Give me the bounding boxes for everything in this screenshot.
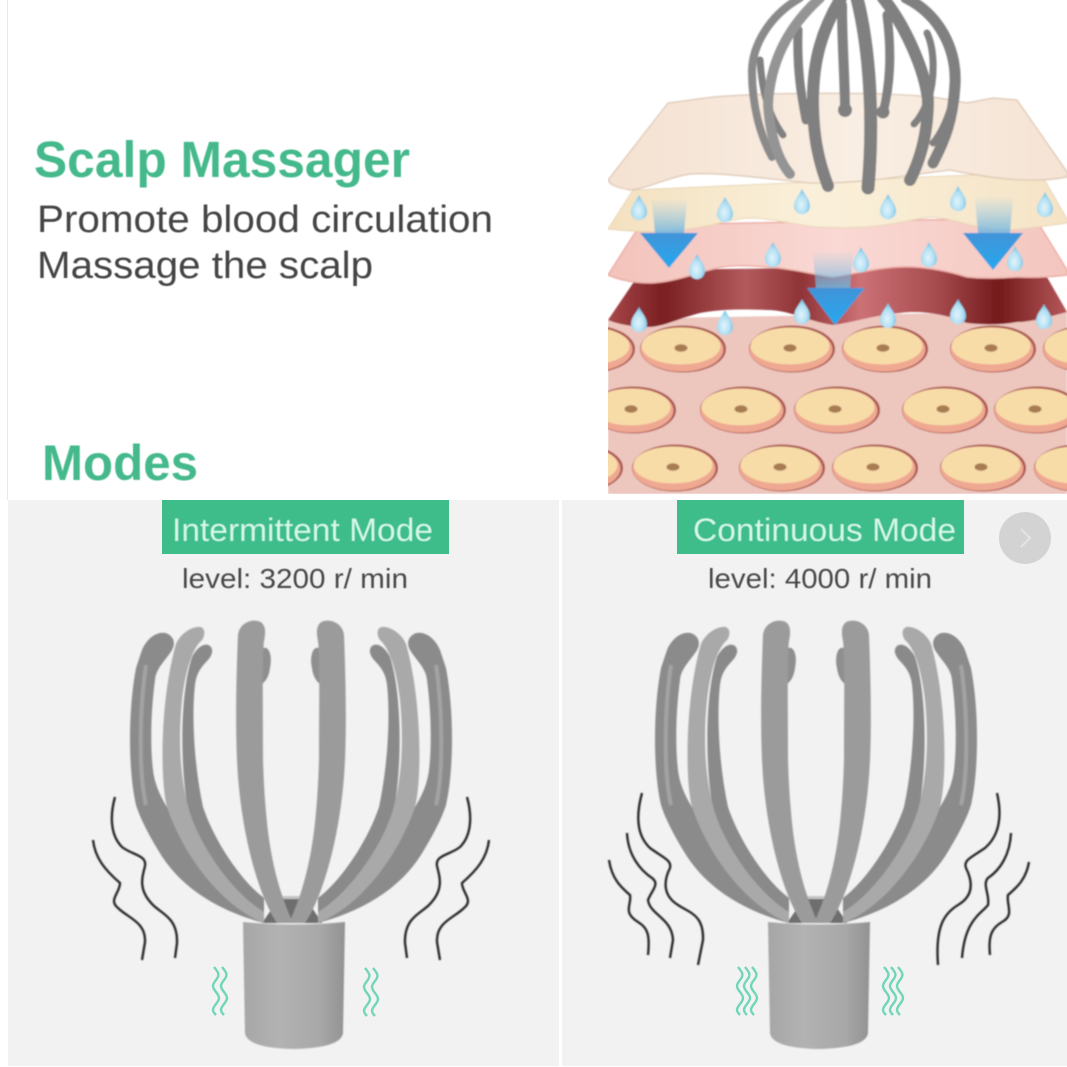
top skin layer bbox=[608, 93, 1067, 190]
vibration lines bbox=[93, 797, 489, 960]
mode label: Intermittent Mode bbox=[172, 512, 433, 548]
heading: Scalp Massager: Scalp Massager bbox=[34, 131, 410, 188]
massager product bbox=[655, 621, 977, 1049]
speed level: level: 3200 r/ min bbox=[182, 563, 408, 594]
mode label: Continuous Mode bbox=[693, 512, 956, 548]
speed level: level: 4000 r/ min bbox=[708, 563, 932, 594]
green vibration marks bbox=[737, 967, 903, 1015]
mode label bbox=[677, 500, 964, 554]
cream layer bbox=[608, 172, 1067, 231]
red tissue layer bbox=[608, 265, 1067, 327]
arrows bbox=[640, 197, 1023, 325]
massager head on skin bbox=[752, 0, 955, 188]
panel: continuous mode bbox=[562, 500, 1067, 1066]
green vibration marks bbox=[213, 967, 378, 1016]
text block: benefits: Massage the scalp bbox=[37, 245, 373, 287]
pink layer bbox=[608, 218, 1067, 283]
next arrow button bbox=[999, 512, 1051, 564]
massager product bbox=[130, 621, 452, 1049]
text block: benefits bbox=[37, 199, 493, 287]
skin base with cells bbox=[608, 312, 1067, 494]
vibration lines bbox=[609, 793, 1029, 965]
water drops bbox=[631, 186, 1053, 335]
text block: benefits: Promote blood circulation bbox=[37, 199, 493, 241]
heading: Modes: Modes bbox=[42, 435, 198, 491]
left edge rule bbox=[7, 0, 8, 500]
illustration: skin layers bbox=[608, 0, 1067, 494]
panel: intermittent mode bbox=[8, 500, 559, 1066]
mode label bbox=[162, 500, 449, 554]
